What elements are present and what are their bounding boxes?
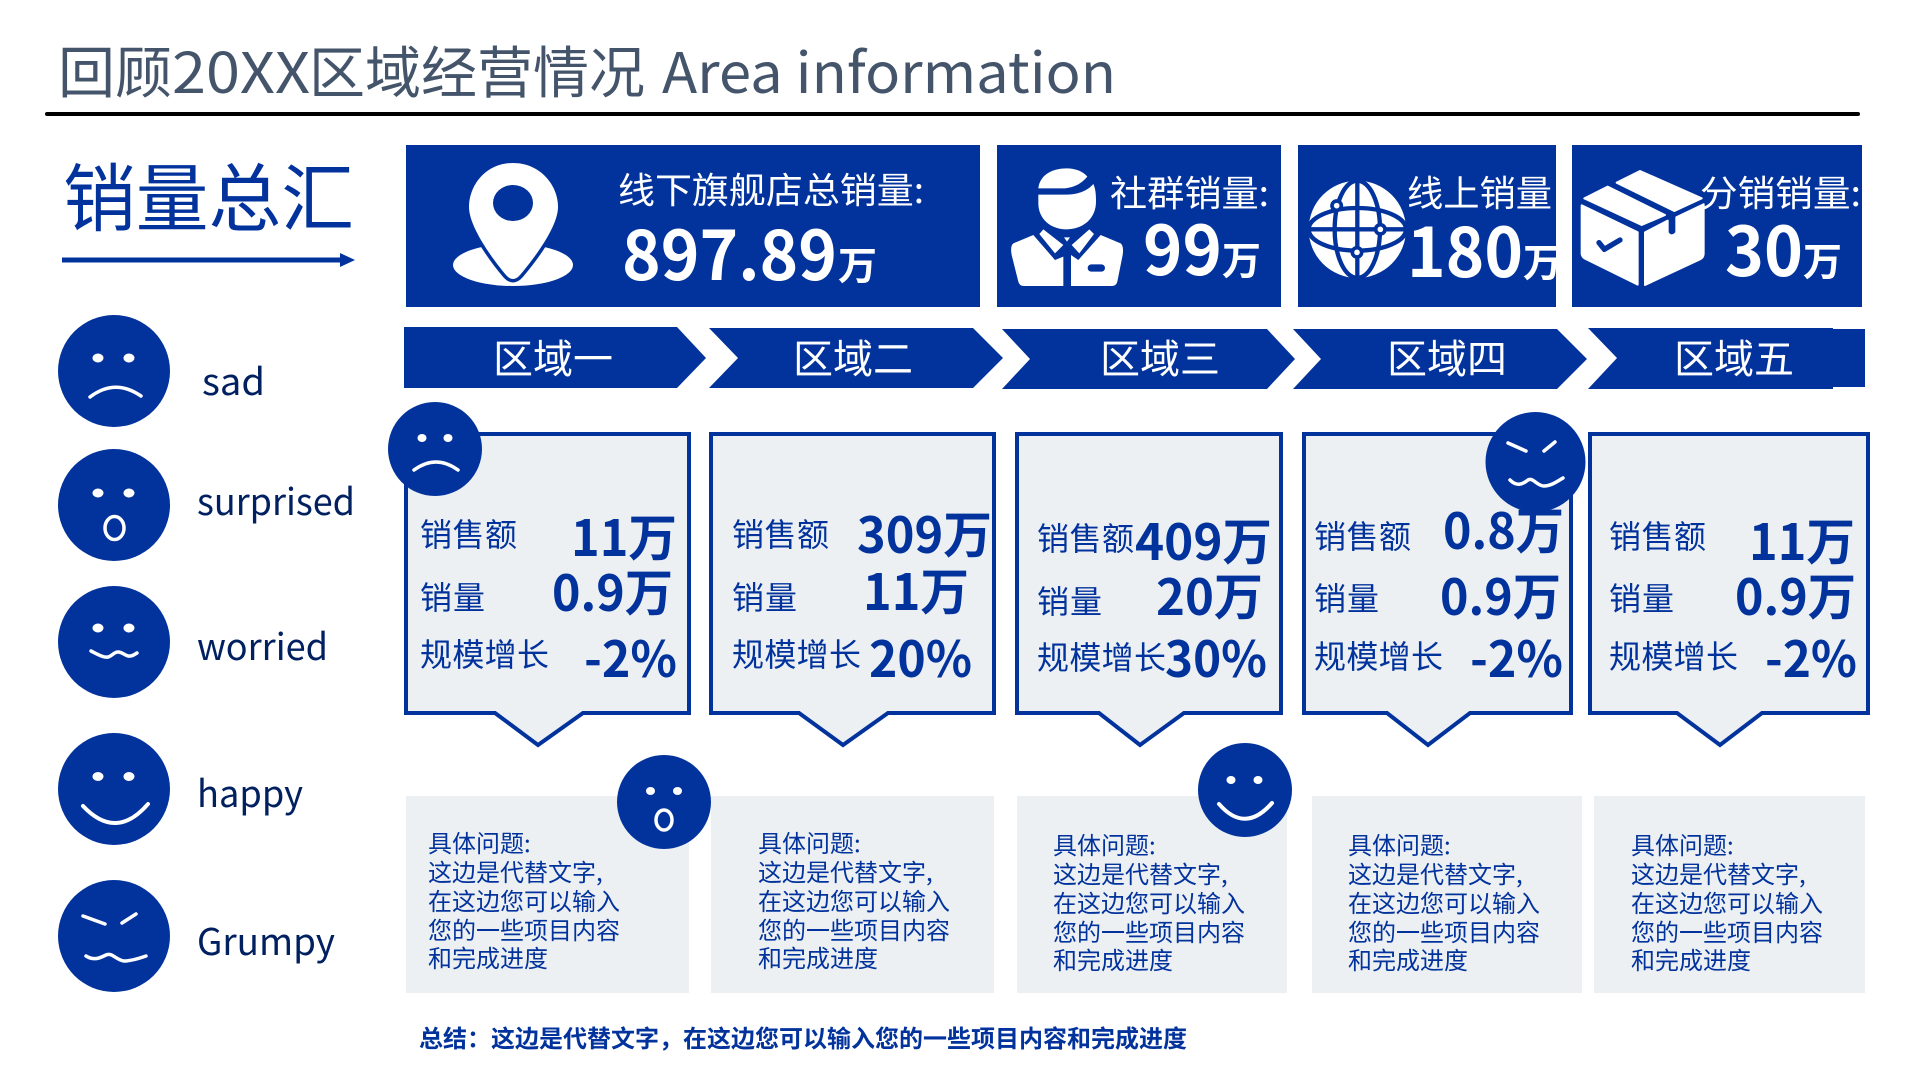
problem box: region 5: 在这边您可以输入	[1631, 884, 1823, 919]
card: region 5 metrics: 11万	[1749, 503, 1855, 575]
problem box: region 4: 和完成进度	[1348, 941, 1468, 976]
problem box: region 5: 您的一些项目内容	[1631, 913, 1823, 948]
card: region 3 metrics: 409万	[1135, 503, 1272, 575]
number: 99万: 99	[1143, 196, 1222, 295]
problem box: region 1: 您的一些项目内容	[428, 911, 620, 946]
problem box: region 1: 在这边您可以输入	[428, 882, 620, 917]
card: region 5 metrics: 规模增长	[1609, 632, 1738, 678]
card: region 4 metrics: -2%	[1470, 620, 1563, 692]
card: region 1 metrics: 销量	[420, 573, 485, 619]
legend: surprised: surprised	[197, 472, 355, 526]
card: region 5 metrics: -2%	[1765, 620, 1857, 692]
problem box: region 5: 和完成进度	[1631, 941, 1751, 976]
card: region 2 metrics: 规模增长	[732, 630, 861, 676]
card: region 4 metrics: 销量	[1314, 574, 1379, 620]
card: region 3 metrics: 30%	[1165, 620, 1267, 692]
problem box: region 1: 和完成进度	[428, 939, 548, 974]
region chevron 5: 区域五	[1674, 327, 1794, 385]
region chevron 2: 区域二	[793, 327, 913, 385]
problem box: region 3: 具体问题:	[1053, 826, 1156, 861]
card: region 3 metrics: 销售额	[1037, 514, 1134, 560]
problem box: region 1	[406, 796, 689, 993]
card: region 2 metrics	[711, 434, 994, 745]
heading: sales summary: 销量总汇	[63, 140, 354, 247]
panel: offline flagship total	[406, 145, 980, 307]
problem box: region 3: 这边是代替文字,	[1053, 855, 1228, 890]
card: region 3 metrics: 20万	[1156, 558, 1263, 630]
problem box: region 2: 在这边您可以输入	[758, 882, 950, 917]
card: region 1 metrics: 销售额	[420, 510, 517, 556]
region chevron 4: 区域四	[1387, 327, 1507, 385]
card: region 2 metrics: 销售额	[732, 510, 829, 556]
title	[58, 29, 1116, 110]
region chevron 3	[1002, 327, 1295, 389]
problem box: region 4	[1312, 796, 1582, 993]
label: online: 线上销量	[1407, 165, 1552, 217]
card: region 1 metrics: 规模增长	[420, 630, 549, 676]
card: region 1 metrics: 0.9万	[552, 554, 673, 626]
card: region 3 metrics: 销量	[1037, 577, 1102, 623]
number: 897.89万: 万	[838, 236, 877, 292]
card: region 1 metrics: 11万	[571, 499, 677, 571]
problem box: region 5: 具体问题:	[1631, 826, 1734, 861]
number: 30万	[1725, 197, 1842, 296]
number: 99万	[1143, 196, 1261, 295]
arrow: summary	[62, 253, 355, 267]
title: 区域经营情况	[309, 29, 645, 110]
card: region 2 metrics: 20%	[869, 620, 972, 692]
card: region 1 metrics	[406, 434, 689, 745]
problem box: region 2	[711, 796, 994, 993]
face badge: sad on region 1	[388, 402, 482, 496]
panel: online sales	[1298, 145, 1562, 307]
panel: distribution sales	[1572, 145, 1862, 307]
problem box: region 3: 在这边您可以输入	[1053, 884, 1245, 919]
number: 30万: 万	[1803, 232, 1842, 288]
label: community: 社群销量:	[1110, 165, 1269, 217]
label: offline total: 线下旗舰店总销量:	[618, 162, 924, 214]
problem box: region 4: 您的一些项目内容	[1348, 913, 1540, 948]
card: region 4 metrics	[1304, 434, 1571, 745]
face badge: grumpy on region 4	[1486, 412, 1586, 512]
problem box: region 2: 您的一些项目内容	[758, 911, 950, 946]
face badge: happy on region 3 problem	[1198, 743, 1292, 837]
number: 99万: 万	[1222, 231, 1261, 287]
face badge: surprised on region 1 problem	[617, 755, 711, 849]
card: region 5 metrics	[1590, 434, 1868, 745]
panel: community sales	[997, 145, 1281, 307]
region chevron 1: 区域一	[493, 327, 613, 385]
legend: worried	[58, 586, 328, 698]
problem box: region 3	[1017, 796, 1287, 993]
icon: person	[1011, 168, 1123, 286]
legend: sad	[58, 315, 265, 427]
region chevron 3: 区域三	[1100, 327, 1220, 385]
legend: grumpy: Grumpy	[197, 912, 335, 966]
card: region 4 metrics: 销售额	[1314, 512, 1411, 558]
problem box: region 3: 您的一些项目内容	[1053, 913, 1245, 948]
number: 180万: 180	[1407, 198, 1523, 297]
card: region 3 metrics	[1017, 434, 1281, 745]
region chevron 4	[1293, 327, 1587, 389]
card: region 5 metrics: 销售额	[1609, 512, 1706, 558]
card: region 3 metrics: 规模增长	[1037, 633, 1166, 679]
problem box: region 4: 这边是代替文字,	[1348, 855, 1523, 890]
problem box: region 1: 具体问题:	[428, 824, 531, 859]
problem box: region 1: 这边是代替文字,	[428, 853, 603, 888]
legend: sad: sad	[202, 352, 265, 406]
icon: package box	[1582, 171, 1704, 285]
number: 30万: 30	[1725, 197, 1803, 296]
problem box: region 5: 这边是代替文字,	[1631, 855, 1806, 890]
title: Area information	[662, 29, 1116, 110]
region chevron 5	[1588, 327, 1865, 389]
card: region 2 metrics: 销量	[732, 573, 797, 619]
card: region 5 metrics: 销量	[1609, 574, 1674, 620]
icon: globe	[1309, 180, 1406, 279]
card: region 2 metrics: 11万	[863, 553, 969, 625]
icon: location pin	[453, 163, 573, 286]
problem box: region 3: 和完成进度	[1053, 941, 1173, 976]
summary note: 总结：这边是代替文字，在这边您可以输入您的一些项目内容和完成进度	[419, 1019, 1187, 1054]
card: region 4 metrics: 0.8万	[1443, 492, 1564, 564]
title: 20XX	[172, 29, 310, 110]
problem box: region 2: 具体问题:	[758, 824, 861, 859]
label: distribution: 分销销量:	[1700, 165, 1861, 217]
problem box: region 2: 和完成进度	[758, 939, 878, 974]
legend: surprised	[58, 449, 355, 561]
card: region 1 metrics: -2%	[584, 620, 677, 692]
number: 180万	[1412, 226, 1556, 280]
card: region 4 metrics: 0.9万	[1440, 558, 1561, 630]
legend: worried: worried	[197, 617, 328, 671]
region chevron 1	[404, 327, 706, 388]
title: 回顾	[58, 29, 172, 110]
card: region 5 metrics: 0.9万	[1735, 558, 1856, 630]
region chevron 2	[709, 327, 1003, 388]
card: region 4 metrics: 规模增长	[1314, 632, 1443, 678]
problem box: region 4: 具体问题:	[1348, 826, 1451, 861]
problem box: region 2: 这边是代替文字,	[758, 853, 933, 888]
problem box: region 5	[1594, 796, 1865, 993]
legend: happy: happy	[197, 764, 303, 818]
legend: grumpy	[58, 880, 335, 992]
number: 897.89万: 897.89	[622, 201, 837, 300]
legend: happy	[58, 733, 303, 845]
card: region 2 metrics: 309万	[857, 496, 992, 568]
number: 180万: 万	[1523, 233, 1562, 289]
problem box: region 4: 在这边您可以输入	[1348, 884, 1540, 919]
